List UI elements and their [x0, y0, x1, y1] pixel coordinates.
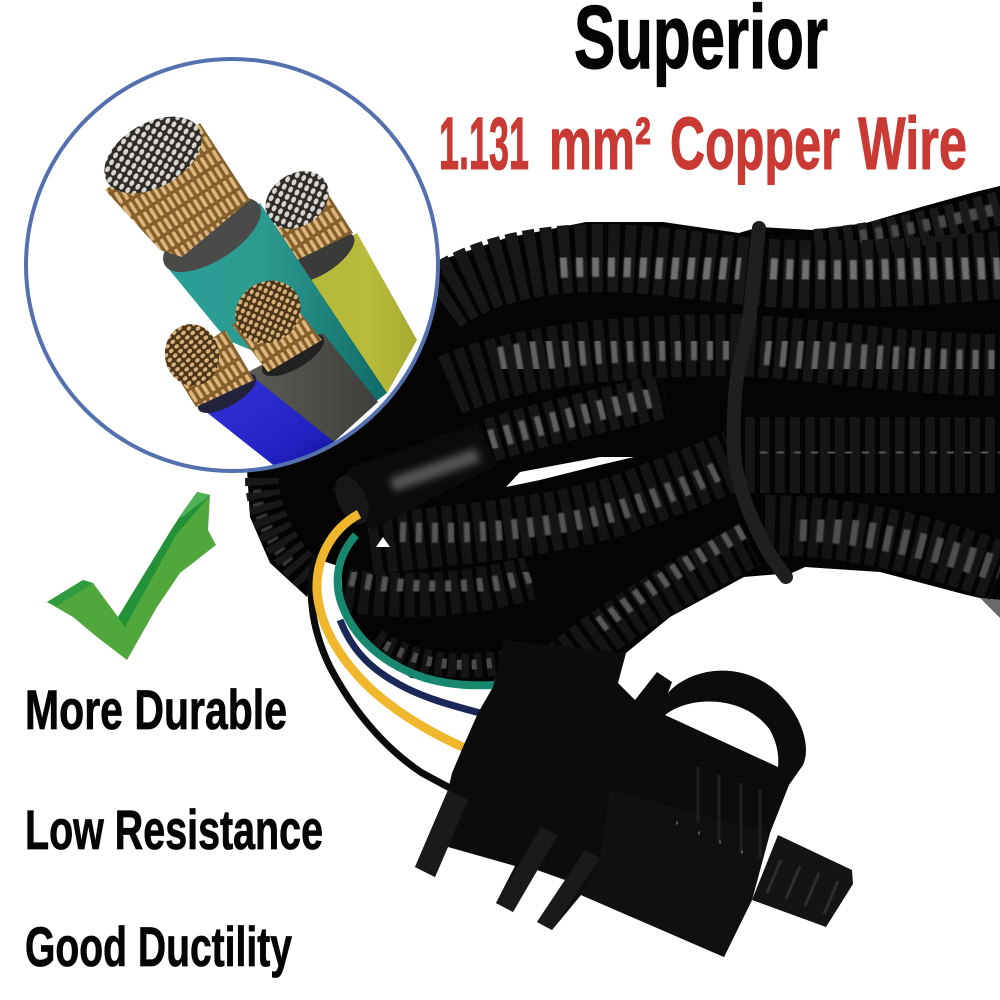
hose: third run right of tie: [745, 452, 1000, 455]
icon: green checkmark: [47, 492, 216, 660]
benefit: good ductility: Good Ductility: [25, 915, 292, 978]
hose: to connector: [560, 530, 750, 665]
grip dots: [676, 823, 743, 852]
flange 1: [415, 790, 468, 877]
end of bundle grey edge: [980, 598, 1000, 618]
wire: green: [338, 535, 495, 685]
hose: center diagonal: [370, 460, 735, 545]
coloured wires: [311, 514, 495, 788]
hose: lower right: [765, 525, 1000, 572]
cap shading: [581, 790, 770, 957]
benefit: more durable: More Durable: [25, 678, 287, 741]
hose: lower: [345, 575, 530, 595]
subtitle: [439, 102, 967, 185]
cable: yellow: [265, 171, 417, 393]
hose: top run: [440, 258, 1000, 300]
flange 2: [496, 827, 558, 912]
rubber sleeve: [328, 423, 497, 530]
cable tie: [734, 228, 786, 577]
cable: grey: [232, 280, 378, 442]
plug tab: [752, 835, 853, 927]
corrugated hose bundle: [247, 186, 1000, 685]
subtitle: 1.131: [439, 102, 529, 185]
bundle silhouette: [247, 186, 1000, 685]
wire: blue: [340, 620, 480, 713]
subtitle: Copper: [670, 102, 840, 185]
black plug connector: [415, 640, 806, 957]
hose: left loop: [255, 478, 312, 578]
inset circle: copper wire close-up: [26, 59, 438, 471]
hose: second run: [450, 345, 1000, 385]
small gap near sleeve: [376, 537, 390, 547]
flange 3: [537, 850, 600, 930]
cable: teal: [91, 101, 387, 402]
cable: blue: [160, 320, 338, 468]
hose: lowest behind green wire: [375, 640, 505, 666]
wire: yellow: [317, 514, 465, 748]
subtitle: mm²: [549, 102, 651, 185]
hose: upper right: [815, 208, 1000, 246]
benefit: low resistance: Low Resistance: [25, 798, 323, 861]
hose: from sleeve: [490, 396, 665, 440]
circle outline: [26, 59, 438, 471]
grip ribs: [698, 767, 760, 858]
gap in bundle: [506, 457, 634, 487]
wire: black: [311, 555, 450, 788]
strap opening: [665, 701, 778, 767]
